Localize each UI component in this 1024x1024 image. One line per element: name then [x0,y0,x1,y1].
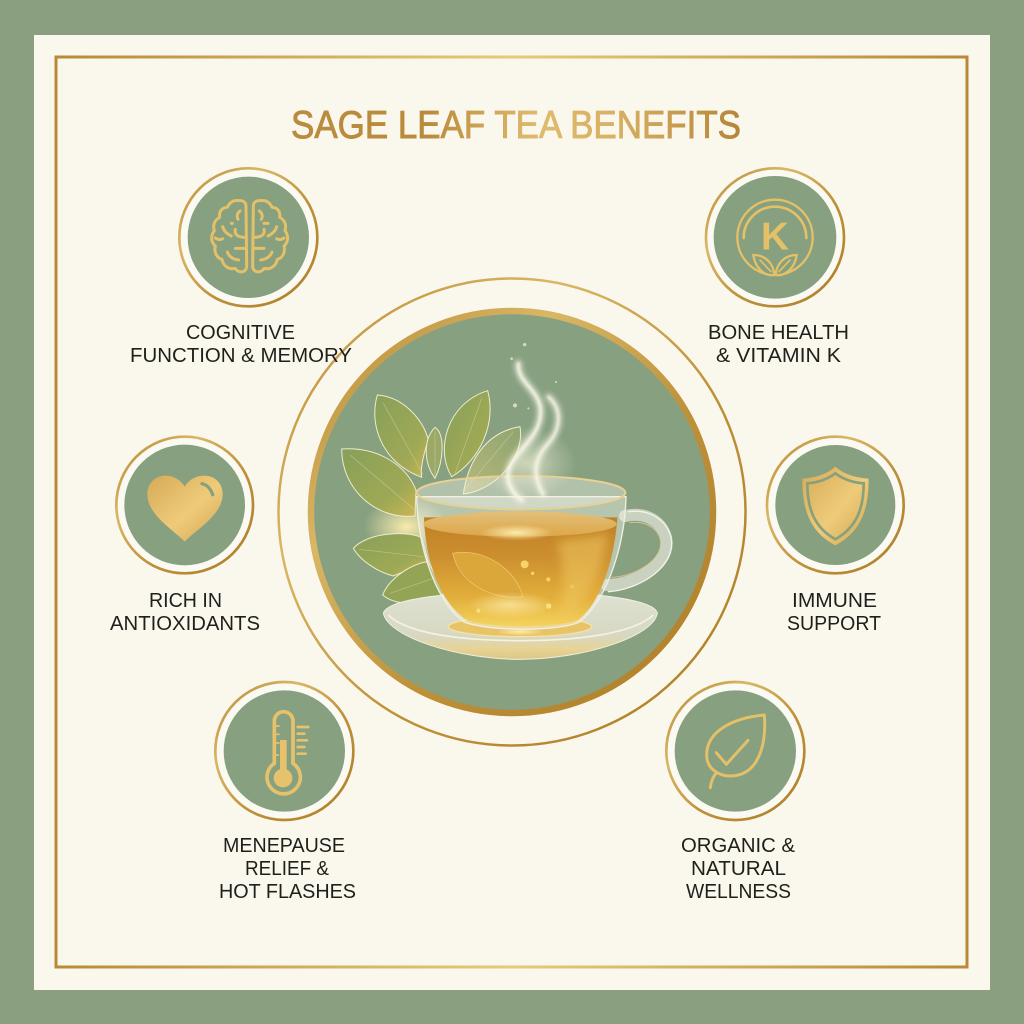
light reflections in tea [467,525,574,636]
glass cup body [417,497,626,629]
label: support: SUPPORT [787,613,881,635]
benefit: cognitive function and memory [130,168,352,367]
icon: vitamin K with leaves: K [761,216,789,259]
steam sparkles [510,343,557,409]
label: organic: ORGANIC & [681,835,796,857]
tea [424,517,617,626]
benefit: menopause relief and hot flashes [215,682,356,903]
label: bone health: BONE HEALTH [708,322,849,344]
glow behind the cup [363,497,450,557]
tea surface [423,511,617,537]
tea cup and sage illustration [342,343,672,659]
icon: leaf with check mark [666,682,804,820]
icon: gold heart [116,437,253,573]
label: wellness: WELLNESS [686,881,791,903]
label: and vitamin k: & VITAMIN K [716,345,842,367]
sage leaves [342,391,521,603]
label: function and memory: FUNCTION & MEMORY [130,345,352,367]
benefit: organic and natural wellness [666,682,804,903]
label: menepause: MENEPAUSE [223,835,345,857]
label: cognitive: COGNITIVE [186,322,295,344]
gold frame [56,57,967,967]
steam [508,363,558,500]
icon: thermometer [215,682,353,820]
icon: shield [767,437,904,573]
glow behind the steam [477,427,577,500]
submerged leaf [453,552,523,597]
icon: brain [179,168,317,306]
outer thin ring [278,278,746,746]
cup rim [417,476,625,509]
lighter band on the right of the tea [557,533,608,618]
label: relief and: RELIEF & [245,858,330,880]
green medallion with gold border [311,311,713,713]
benefit: rich in antioxidants [110,437,260,635]
cup handle [607,511,672,592]
central illustration [278,278,746,746]
cup foot [448,617,592,637]
title: SAGE LEAF TEA BENEFITS [291,104,741,147]
label: rich in: RICH IN [149,590,222,612]
label: hot flashes: HOT FLASHES [219,881,356,903]
label: natural: NATURAL [691,858,786,880]
benefit: bone health and vitamin k [706,168,849,367]
label: antioxidants: ANTIOXIDANTS [110,613,260,635]
saucer rim highlight [388,615,653,641]
icon: vitamin K with leaves [706,168,844,306]
leaf veins [350,398,513,593]
label: immune: IMMUNE [792,590,877,612]
saucer [383,592,657,659]
benefit: immune support [767,437,904,635]
